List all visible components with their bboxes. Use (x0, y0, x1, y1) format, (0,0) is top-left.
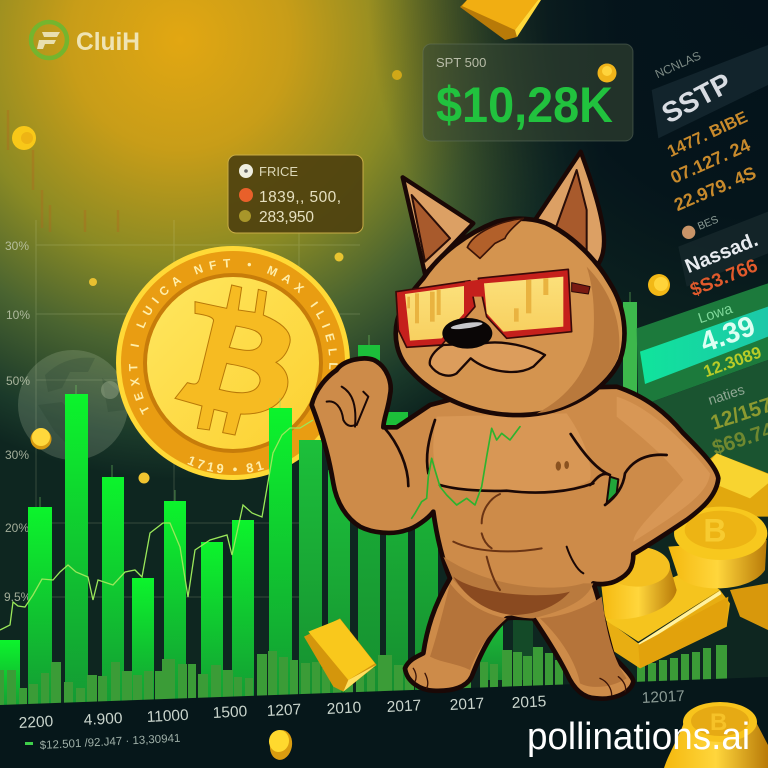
small gold bar (304, 618, 377, 692)
year axis labels: 4.900 (83, 710, 123, 729)
year axis labels: 2017 (386, 697, 422, 716)
arm and chest lines (384, 420, 667, 505)
logo: CluiH (76, 28, 140, 56)
belly shade (443, 557, 593, 618)
bridge (465, 279, 483, 297)
dog head (396, 152, 624, 415)
arm highlight (617, 397, 710, 542)
underbelly dark band (453, 577, 570, 615)
right lens (484, 277, 563, 332)
year axis labels: 2017 (449, 695, 485, 714)
year axis labels: 2200 (18, 713, 54, 732)
axis labels: 20% (5, 521, 29, 535)
hair tuft (467, 218, 523, 258)
ticker orange values (664, 107, 759, 215)
gold coin back (600, 551, 677, 619)
large gold bar (607, 590, 730, 668)
bitcoin glyph on coin: B (703, 513, 726, 549)
lens reflection candles (407, 278, 548, 323)
S&P price card: SPT 500 (436, 55, 486, 70)
coin year text: 1719 • 81 (187, 456, 264, 473)
axis labels: 30% (5, 239, 29, 253)
price card: FRICE (259, 164, 298, 179)
chest highlight (433, 413, 591, 492)
bitcoin coin (116, 246, 350, 480)
watermark: pollinations.ai (527, 716, 750, 758)
year axis labels: 2010 (326, 699, 362, 718)
legend footer text: $12.501 /92.J47 · 13,30941 (40, 733, 181, 752)
muzzle (430, 342, 545, 376)
gold coin front (668, 540, 767, 588)
coin ring text: TEXT I LUICA NFT • MAX ILIELLS (128, 258, 338, 415)
left frame (396, 281, 475, 347)
ticker orange values: 07.127. 24 (667, 135, 753, 188)
gold bar falling top (460, 0, 541, 40)
chart grid lines (36, 220, 360, 640)
axis labels: 50% (6, 374, 30, 388)
fist finger lines (327, 387, 583, 573)
chest dot right (564, 461, 569, 469)
price card: 283,950 (259, 209, 314, 226)
S&P price card: $10,28K (436, 77, 613, 133)
right side ticker panel (637, 45, 768, 480)
right ear (532, 152, 604, 267)
axis labels (4, 239, 32, 604)
lower right gold block (730, 583, 768, 630)
gold coin bottom right: B (710, 709, 727, 736)
left lens (405, 286, 464, 341)
S&P price card (423, 44, 633, 141)
lower dark green band (638, 360, 768, 480)
far gold bar (683, 453, 768, 517)
glasses arms (572, 283, 590, 294)
background small volume bars (0, 645, 727, 710)
teal value: 4.39 (696, 310, 759, 359)
price line (0, 420, 313, 630)
leg and foot shade (430, 583, 627, 687)
year axis labels: 1207 (266, 701, 302, 720)
Nasdaq title: Nassad. (682, 229, 761, 278)
chest dots (556, 461, 561, 471)
axis labels: 9.5% (4, 590, 32, 604)
teal highlight bar (640, 307, 768, 384)
right side dark wash (300, 0, 768, 420)
cartoon dog mascot (312, 152, 718, 699)
sunglasses (396, 269, 590, 347)
year axis labels: 12017 (641, 688, 685, 707)
ticker orange values: 1477. BIBE (664, 107, 750, 161)
bar wicks (40, 292, 630, 507)
nose highlight (450, 321, 483, 331)
armpit gap (607, 477, 618, 503)
right frame (478, 269, 572, 338)
bitcoin symbol (175, 285, 290, 435)
green band (637, 283, 768, 407)
Nasdaq price: $S3.766 (687, 255, 761, 301)
nose (442, 318, 492, 349)
gold coin bottom center (267, 728, 294, 762)
Nasdaq label: BES (696, 214, 720, 233)
floating small coins (12, 70, 670, 484)
body silhouette (312, 358, 718, 699)
logo (31, 22, 140, 58)
foot toes (413, 668, 626, 695)
teal band label: Lowa (696, 301, 735, 327)
year axis labels: 1500 (212, 703, 248, 722)
price card: 1839,, 500, (259, 189, 341, 206)
year axis labels: 2015 (511, 693, 547, 712)
axis labels: 30% (5, 448, 29, 462)
year axis labels (18, 688, 685, 732)
head side shade (537, 267, 619, 413)
yellow value: 12.3089 (701, 343, 764, 381)
head shape (396, 219, 624, 415)
ticker title: SSTP (657, 67, 737, 130)
chart line on chest (412, 427, 520, 518)
ab muscle lines (453, 494, 542, 590)
dog body (312, 358, 718, 699)
gold coin bottom right (664, 702, 768, 768)
year axis labels: 11000 (146, 707, 189, 726)
bar chart (0, 302, 637, 710)
ticker orange values: 22.979. 4S (671, 163, 759, 215)
axis labels: 10% (6, 308, 30, 322)
ticker band SSTP (652, 45, 768, 138)
price card (228, 155, 363, 233)
left ear (403, 177, 473, 274)
globe (18, 350, 128, 460)
ticker header: NCNLAS (653, 49, 703, 81)
lower label: naties (706, 381, 746, 408)
gold coin and bar stack (600, 453, 768, 668)
Nasdaq icon (682, 226, 695, 239)
bottom dark strip (0, 677, 768, 768)
faint candlesticks upper left (8, 110, 118, 232)
Nasdaq band (678, 212, 768, 287)
lower values (708, 393, 768, 460)
